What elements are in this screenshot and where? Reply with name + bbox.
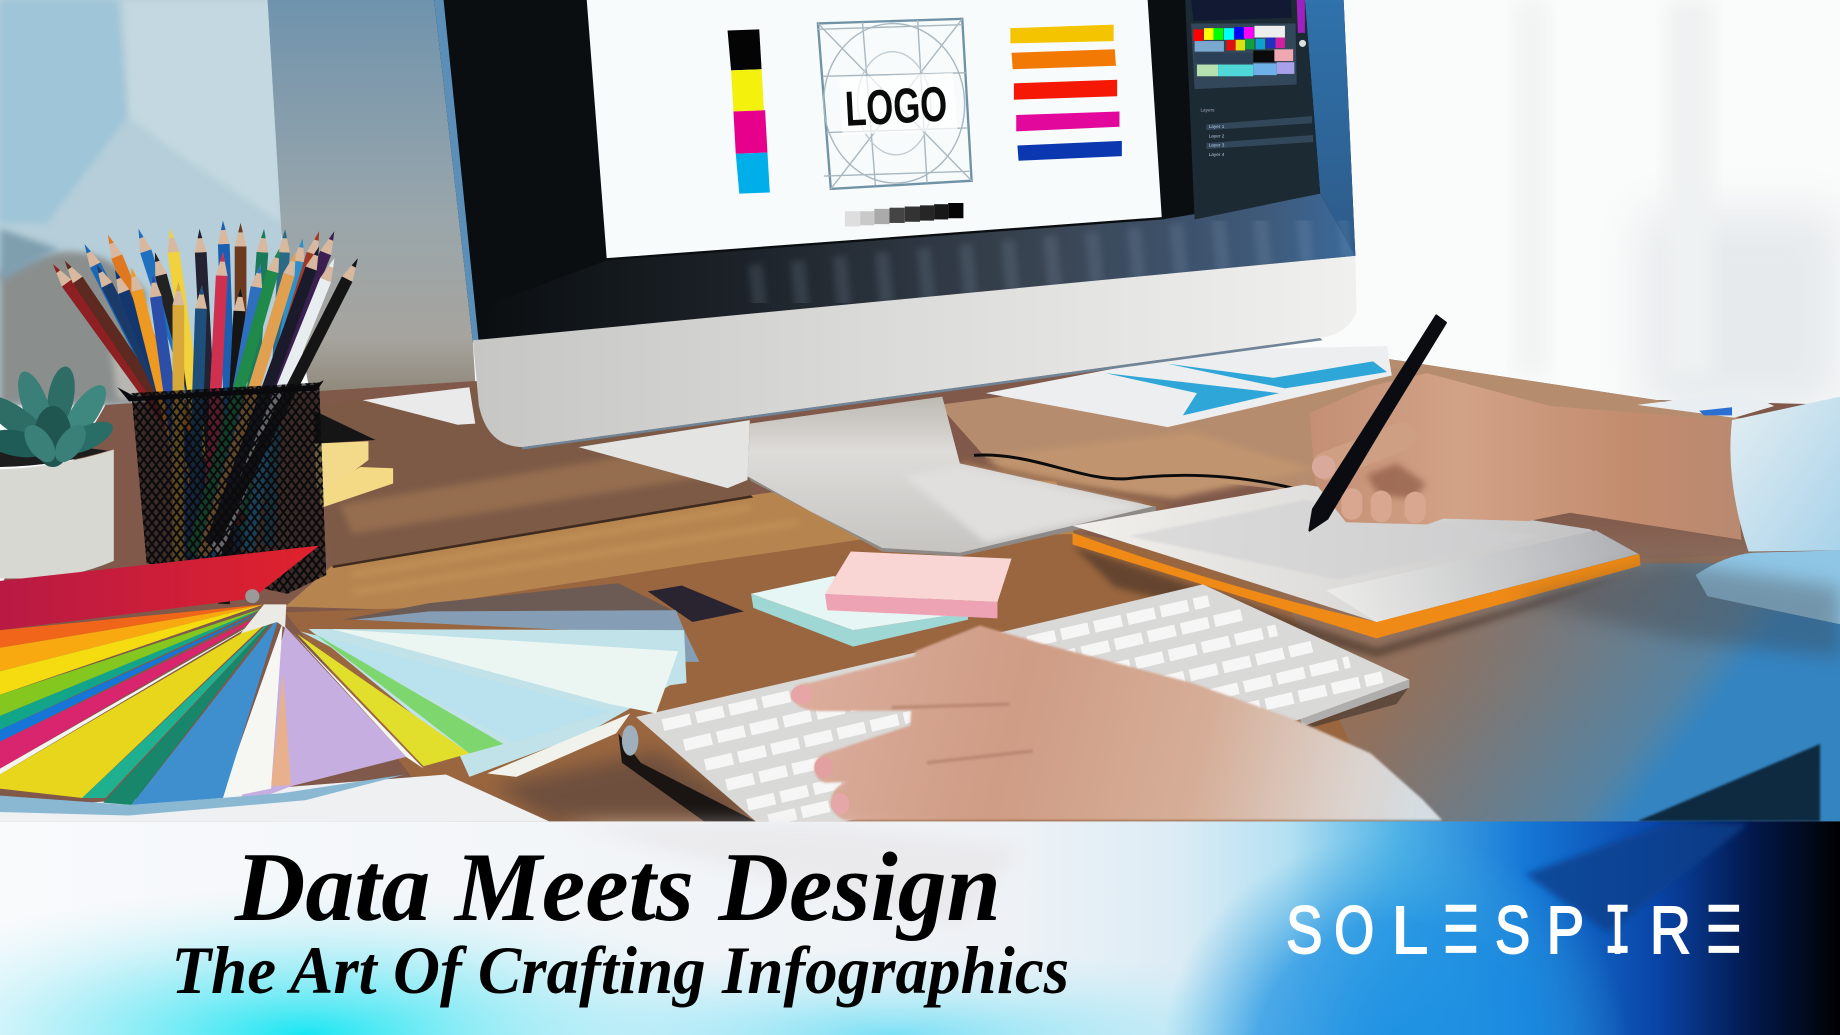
fan bottom shadow [0, 774, 405, 816]
brand logo [1286, 893, 1740, 968]
keys [663, 601, 1382, 820]
bezel right blue edge [1305, 0, 1355, 256]
light middle plank [285, 475, 1080, 610]
typing hand [791, 625, 1442, 820]
back plank [0, 352, 1840, 821]
brand logo: R [1650, 893, 1691, 968]
tablet surface [1073, 485, 1638, 622]
brand logo: O [1334, 893, 1374, 968]
software side panel [1185, 0, 1320, 219]
subtitle: The Art Of Crafting Infographics [171, 932, 1069, 1008]
finger crease shadow [1367, 464, 1426, 499]
keyboard bolt [622, 725, 638, 756]
rear swatches [300, 583, 699, 777]
brand logo: S [1495, 893, 1530, 968]
desk [0, 352, 1840, 821]
desk shadow near mouse [1514, 561, 1840, 657]
tablet lower strip [1326, 530, 1638, 622]
layers list: Layer 2 [1209, 133, 1225, 138]
logo grid [818, 19, 972, 189]
pencil cup [117, 380, 326, 594]
tablet active area [1129, 500, 1537, 580]
pen [1310, 316, 1446, 530]
red top swatch [0, 546, 319, 630]
brand logo: P [1547, 893, 1584, 968]
cable [974, 455, 1303, 491]
color bars [1010, 25, 1122, 161]
finger creases [892, 704, 1033, 763]
right hand with pen [1310, 316, 1741, 540]
tablet shadow [1073, 546, 1643, 657]
palm [904, 625, 1442, 820]
monitor bezel [434, 0, 1355, 343]
second monitor back [268, 0, 475, 399]
bezel left rim [434, 0, 479, 343]
finger three [831, 760, 1033, 820]
drawing tablet [1073, 485, 1643, 657]
background window and wall [0, 0, 1840, 821]
succulent plant [0, 364, 117, 579]
finger one [791, 634, 997, 711]
brand logo: L [1392, 893, 1428, 968]
finger two [814, 710, 1021, 783]
small printed card [648, 586, 744, 622]
keyboard body [636, 584, 1409, 821]
shirt sleeve [1730, 397, 1840, 552]
fan edge highlights [241, 604, 286, 634]
brand logo: I [1611, 893, 1624, 968]
bottom swatches [103, 616, 503, 806]
layers list: Layer 1 [1209, 124, 1225, 129]
front planks [285, 534, 1840, 821]
layers list: Layer 3 [1209, 143, 1225, 148]
black device [314, 411, 376, 444]
colored pencils [48, 220, 363, 604]
bezel lower reflection [479, 194, 1355, 341]
thumb [1326, 437, 1402, 466]
mouse [1696, 550, 1840, 624]
rainbow swatches [0, 604, 277, 798]
layers list: Layers [1200, 107, 1215, 112]
logo text: LOGO [844, 77, 949, 137]
grayscale strip [845, 203, 963, 226]
swatches [1193, 26, 1294, 76]
bezel reflection streaks [751, 232, 1349, 291]
white device behind [363, 387, 475, 425]
keyboard [618, 584, 1409, 821]
papers behind monitor [986, 346, 1774, 427]
layers list [1200, 107, 1313, 157]
swatch fan [0, 546, 699, 821]
blue lower-right fade [1291, 563, 1840, 821]
blurred person in background [0, 0, 282, 405]
monitor chin [473, 256, 1357, 447]
tablet orange edge [1073, 533, 1641, 638]
brand logo: S [1286, 893, 1322, 968]
title: Data Meets Design [234, 833, 1001, 942]
bottom band [0, 821, 1840, 1035]
monitor stand [579, 397, 1156, 556]
paper under fan [0, 774, 549, 821]
fan rivet [245, 589, 259, 603]
keyboard shadow [618, 733, 756, 821]
layers list: Layer 4 [1209, 152, 1225, 157]
yellow sticky pads [314, 441, 393, 508]
color strip [728, 29, 770, 194]
fingernails [791, 685, 812, 704]
desk under-edge dark [1637, 744, 1820, 821]
fingers [1352, 499, 1415, 513]
sticky notes [751, 552, 1012, 647]
monitor [434, 0, 1357, 449]
screen [587, 0, 1162, 258]
